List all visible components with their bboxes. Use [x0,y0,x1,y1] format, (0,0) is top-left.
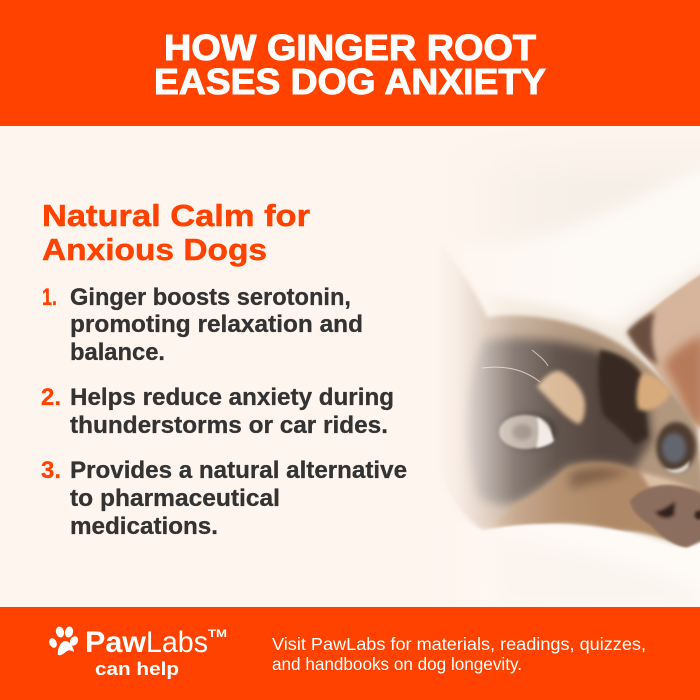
blanket background [497,180,700,543]
list item 3: to pharmaceutical [70,485,280,512]
icon: paw [48,626,80,655]
list item 3: Provides a natural alternative [70,457,407,484]
title: EASES DOG ANXIETY [154,61,546,102]
list item 1: 1. [42,284,57,311]
list item 1: promoting relaxation and [70,311,363,338]
right eye [656,422,696,473]
dark face mask [466,338,652,504]
list item 3: 3. [41,457,61,484]
whiskers [482,350,548,382]
list item 1: balance. [70,339,165,366]
footer text [272,634,646,674]
logo wordmark [85,626,227,659]
dark brow stripe [598,350,648,445]
header banner [0,0,700,126]
footer text: and handbooks on dog longevity. [272,654,522,674]
list item 1 [42,284,363,366]
footer text: Visit PawLabs for materials, readings, quizzes, [272,634,646,654]
dog photo [453,180,700,549]
background ear [627,272,700,430]
list item 2: 2. [41,384,61,411]
list item 1: Ginger boosts serotonin, [70,284,351,311]
list item 3 [41,457,407,540]
subheading: Anxious Dogs [42,232,267,267]
subheading [42,198,310,267]
dog head [454,270,700,549]
logo wordmark: TM [208,628,227,640]
title [154,27,546,102]
tan eyebrow spots [537,371,585,424]
title: HOW GINGER ROOT [164,27,536,68]
left eye [497,411,557,451]
logo wordmark: Paw [85,626,147,659]
logo wordmark: Labs [146,626,208,659]
list item 2: thunderstorms or car rides. [70,412,388,439]
foreground blanket [485,522,700,606]
subheading: Natural Calm for [42,198,310,233]
list item 2 [41,384,394,439]
muzzle [490,463,700,547]
footer banner [0,607,700,700]
logo tagline: can help [95,658,179,679]
list item 3: medications. [70,513,218,540]
nose [630,485,700,548]
left and top fade [420,126,700,531]
list item 2: Helps reduce anxiety during [70,384,394,411]
